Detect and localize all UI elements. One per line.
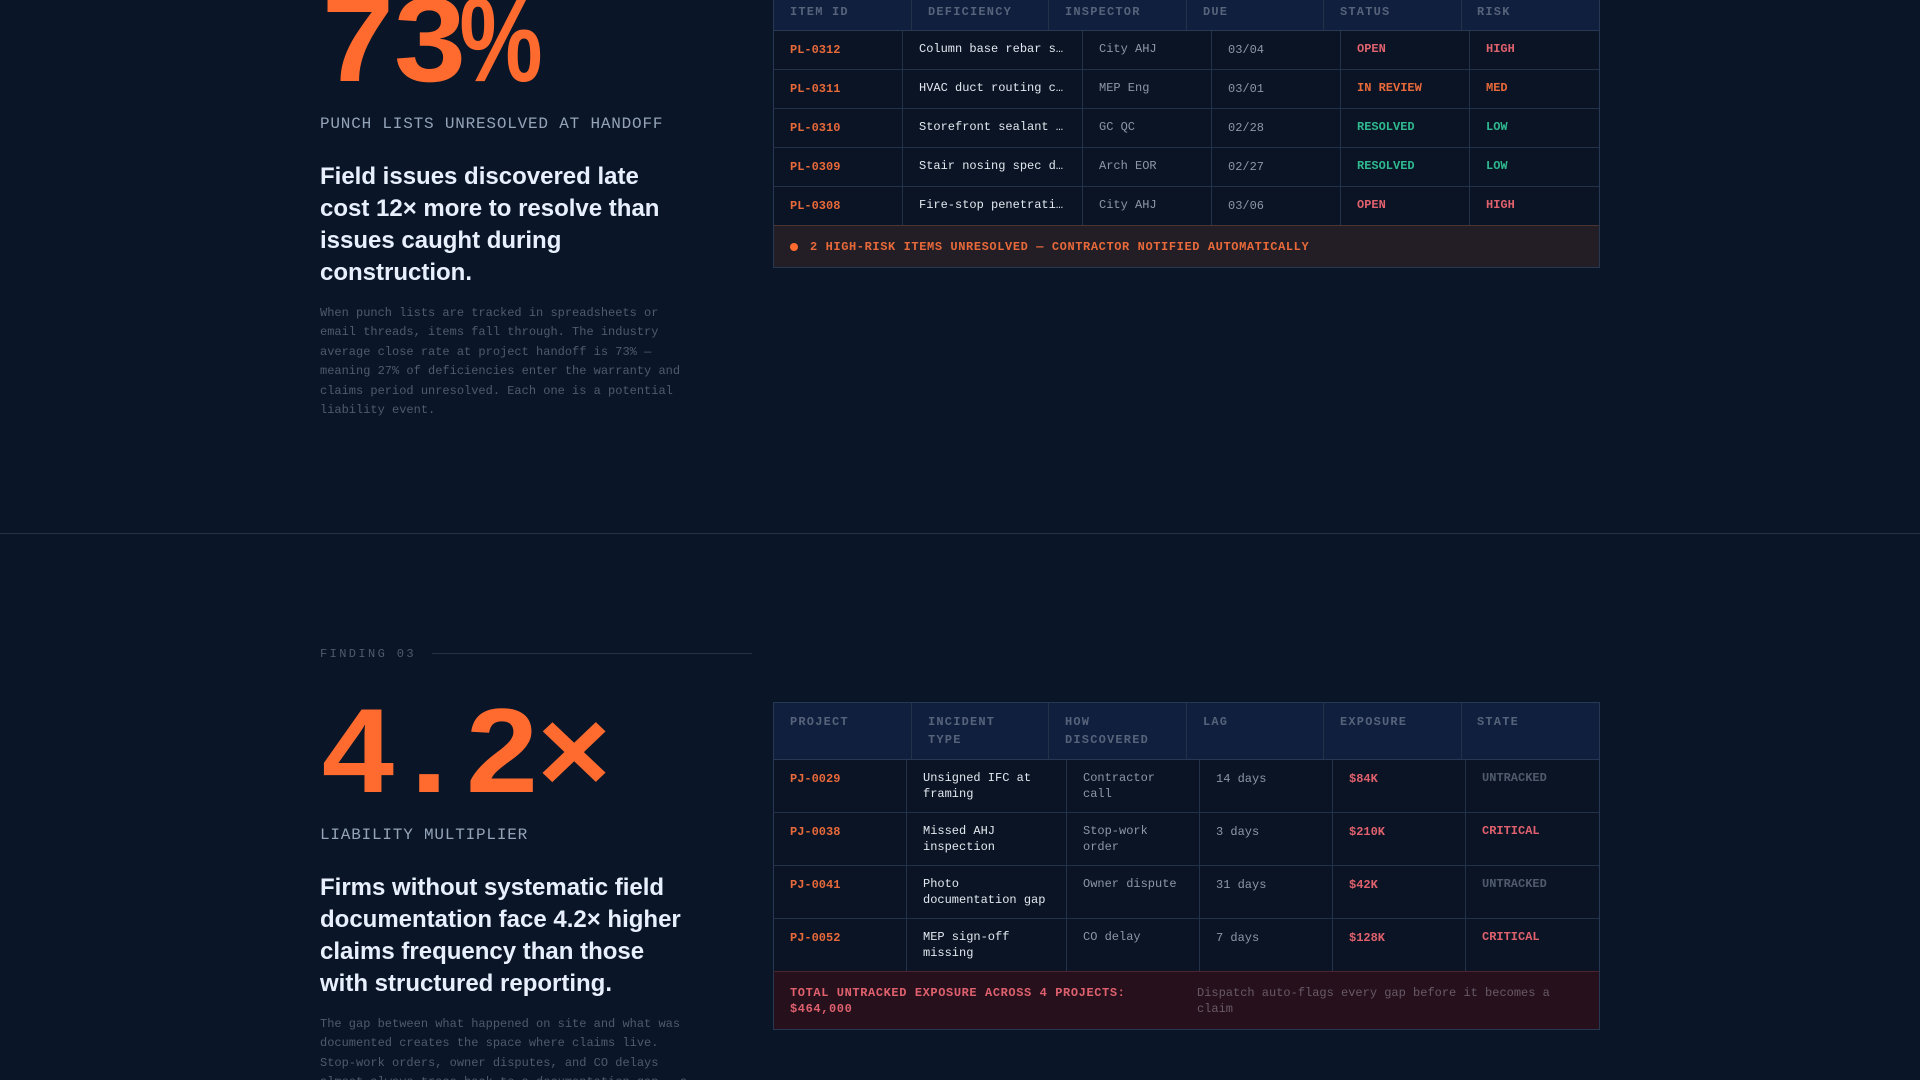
row: PJ-0041: UNTRACKED	[1482, 877, 1547, 891]
table header	[773, 702, 1600, 760]
row: PL-0310: LOW	[1486, 120, 1508, 134]
heading: firms without documentation: with structured reporting.	[320, 970, 612, 997]
heading: field issues: Field issues discovered late	[320, 163, 639, 190]
table header: HOW	[1065, 715, 1090, 729]
row: PJ-0029: call	[1083, 787, 1112, 801]
row: PL-0309: Stair nosing spec d…	[919, 159, 1063, 173]
row: PL-0311: 03/01	[1228, 82, 1264, 96]
row: PJ-0029: PJ-0029	[790, 772, 840, 786]
row: PL-0310	[773, 109, 1600, 148]
body text: punch lists: When punch lists are tracked in spreadsheets or	[320, 306, 658, 320]
row: PJ-0041: 31 days	[1216, 878, 1266, 892]
table header: INSPECTOR	[1065, 5, 1141, 19]
table header: DISCOVERED	[1065, 733, 1149, 747]
row: PL-0311: IN REVIEW	[1357, 81, 1422, 95]
row: PL-0312: 03/04	[1228, 43, 1264, 57]
body text: punch lists: liability event.	[320, 403, 435, 417]
row: PL-0312: HIGH	[1486, 42, 1515, 56]
row: PJ-0029: Unsigned IFC at	[923, 771, 1031, 785]
dispatch note: claim	[1197, 1002, 1233, 1016]
row: PL-0308: City AHJ	[1099, 198, 1157, 212]
alert bar	[773, 225, 1600, 268]
heading: firms without documentation	[320, 874, 681, 997]
body text: gap: The gap between what happened on site and what was	[320, 1016, 680, 1030]
stat: 4.2×: 4	[322, 684, 394, 818]
stat: 4.2×	[322, 684, 611, 818]
table header: INCIDENT	[928, 715, 995, 729]
row: PL-0310: GC QC	[1099, 120, 1135, 134]
row: PJ-0052: missing	[923, 946, 973, 960]
stat: 4.2×: .	[410, 684, 448, 818]
panel: finding 03 summary	[320, 647, 752, 1080]
dispatch note: Dispatch auto-flags every gap before it becomes a	[1197, 986, 1550, 1000]
table header: DUE	[1203, 5, 1228, 19]
row: PJ-0038: 3 days	[1216, 825, 1259, 839]
panel: finding 02 summary	[320, 0, 680, 417]
body text: punch lists	[320, 306, 680, 417]
row: PJ-0029: 14 days	[1216, 772, 1266, 786]
body text: punch lists: meaning 27% of deficiencies enter the warranty and	[320, 364, 680, 378]
row: PJ-0038: Missed AHJ	[923, 824, 995, 838]
stat label: LIABILITY MULTIPLIER	[320, 826, 528, 844]
row: PL-0308: Fire-stop penetrati…	[919, 198, 1063, 212]
row: PJ-0038: CRITICAL	[1482, 824, 1540, 838]
row: PJ-0029: $84K	[1349, 772, 1378, 786]
row: PJ-0052: $128K	[1349, 931, 1385, 945]
eyebrow: finding 03: FINDING 03	[320, 647, 416, 661]
body text: gap: Stop-work orders, owner disputes, and CO delays	[320, 1056, 658, 1070]
icon: alert dot	[790, 243, 798, 251]
row: PL-0310: Storefront sealant …	[919, 120, 1063, 134]
row: PJ-0041: PJ-0041	[790, 878, 840, 892]
row: PL-0312: City AHJ	[1099, 42, 1157, 56]
row: PJ-0029: UNTRACKED	[1482, 771, 1547, 785]
row: PL-0309: LOW	[1486, 159, 1508, 173]
table header: RISK	[1477, 5, 1511, 19]
table header: STATE	[1477, 715, 1519, 729]
section divider	[0, 533, 1920, 534]
total text: TOTAL UNTRACKED EXPOSURE ACROSS 4 PROJECTS:	[790, 986, 1125, 1000]
row: PL-0311: MED	[1486, 81, 1508, 95]
row: PJ-0052: 7 days	[1216, 931, 1259, 945]
row: PL-0310: 02/28	[1228, 121, 1264, 135]
row: PJ-0041: Photo	[923, 877, 959, 891]
heading: field issues	[320, 163, 659, 286]
total exposure footer	[773, 971, 1600, 1030]
heading: field issues: issues caught during	[320, 227, 561, 254]
body text: punch lists: average close rate at project handoff is 73% —	[320, 344, 651, 358]
alert text: 2 HIGH-RISK ITEMS UNRESOLVED — CONTRACTOR NOTIFIED AUTOMATICALLY	[810, 240, 1309, 254]
row: PJ-0029: framing	[923, 787, 973, 801]
row: PL-0308: 03/06	[1228, 199, 1264, 213]
row: PJ-0029	[773, 760, 1600, 813]
row: PJ-0041: Owner dispute	[1083, 877, 1177, 891]
heading: firms without documentation: Firms without systematic field	[320, 874, 664, 901]
table header: LAG	[1203, 715, 1228, 729]
row: PL-0308: OPEN	[1357, 198, 1386, 212]
body text: punch lists: email threads, items fall through. The industry	[320, 325, 658, 339]
row: PJ-0041: documentation gap	[923, 893, 1045, 907]
row: PL-0312: PL-0312	[790, 43, 840, 57]
body text: gap: documented creates the space where claims live.	[320, 1036, 658, 1050]
row: PL-0311: HVAC duct routing c…	[919, 81, 1063, 95]
row: PJ-0038: order	[1083, 840, 1119, 854]
row: PL-0311: PL-0311	[790, 82, 840, 96]
table header: EXPOSURE	[1340, 715, 1407, 729]
row: PL-0309	[773, 148, 1600, 187]
row: PJ-0038: Stop-work	[1083, 824, 1148, 838]
total text	[790, 986, 1125, 1016]
table header: DEFICIENCY	[928, 5, 1012, 19]
row: PL-0308: HIGH	[1486, 198, 1515, 212]
table header: TYPE	[928, 733, 962, 747]
row: PL-0308	[773, 187, 1600, 226]
row: PL-0309: Arch EOR	[1099, 159, 1157, 173]
stat: 73%	[322, 0, 543, 107]
row: PL-0310: PL-0310	[790, 121, 840, 135]
heading: field issues: cost 12× more to resolve than	[320, 195, 659, 222]
row: PL-0311: MEP Eng	[1099, 81, 1149, 95]
heading: firms without documentation: documentation face 4.2× higher	[320, 906, 681, 933]
row: PJ-0029: Contractor	[1083, 771, 1155, 785]
body text: punch lists: claims period unresolved. Each one is a potential	[320, 384, 673, 398]
heading: field issues: construction.	[320, 259, 472, 286]
row: PJ-0052: CRITICAL	[1482, 930, 1540, 944]
row: PJ-0038: $210K	[1349, 825, 1385, 839]
total text: $464,000	[790, 1002, 852, 1016]
row: PL-0309: RESOLVED	[1357, 159, 1415, 173]
row: PL-0312: OPEN	[1357, 42, 1386, 56]
table header	[773, 0, 1600, 31]
body text: gap	[320, 1016, 687, 1080]
row: PL-0309: PL-0309	[790, 160, 840, 174]
row: PL-0310: RESOLVED	[1357, 120, 1415, 134]
panel: incident table	[773, 702, 1600, 1030]
row: PJ-0038: PJ-0038	[790, 825, 840, 839]
row: PJ-0038: inspection	[923, 840, 995, 854]
row: PJ-0052: MEP sign-off	[923, 930, 1009, 944]
row: PL-0309: 02/27	[1228, 160, 1264, 174]
row: PJ-0052	[773, 919, 1600, 972]
row: PJ-0038	[773, 813, 1600, 866]
stat: 4.2×: ×	[537, 684, 611, 818]
table header: STATUS	[1340, 5, 1390, 19]
row: PL-0308: PL-0308	[790, 199, 840, 213]
row: PJ-0052: PJ-0052	[790, 931, 840, 945]
row: PJ-0041: $42K	[1349, 878, 1378, 892]
row: PL-0312: Column base rebar s…	[919, 42, 1063, 56]
dispatch note	[1197, 986, 1550, 1016]
heading: firms without documentation: claims frequency than those	[320, 938, 644, 965]
table header: PROJECT	[790, 715, 849, 729]
row: PJ-0041	[773, 866, 1600, 919]
row: PJ-0052: CO delay	[1083, 930, 1141, 944]
panel: punch list table	[773, 0, 1600, 268]
row: PL-0311	[773, 70, 1600, 109]
row: PL-0312	[773, 31, 1600, 70]
stat: 4.2×: 2	[466, 684, 538, 818]
stat label: PUNCH LISTS UNRESOLVED AT HANDOFF	[320, 115, 663, 133]
table header: ITEM ID	[790, 5, 849, 19]
